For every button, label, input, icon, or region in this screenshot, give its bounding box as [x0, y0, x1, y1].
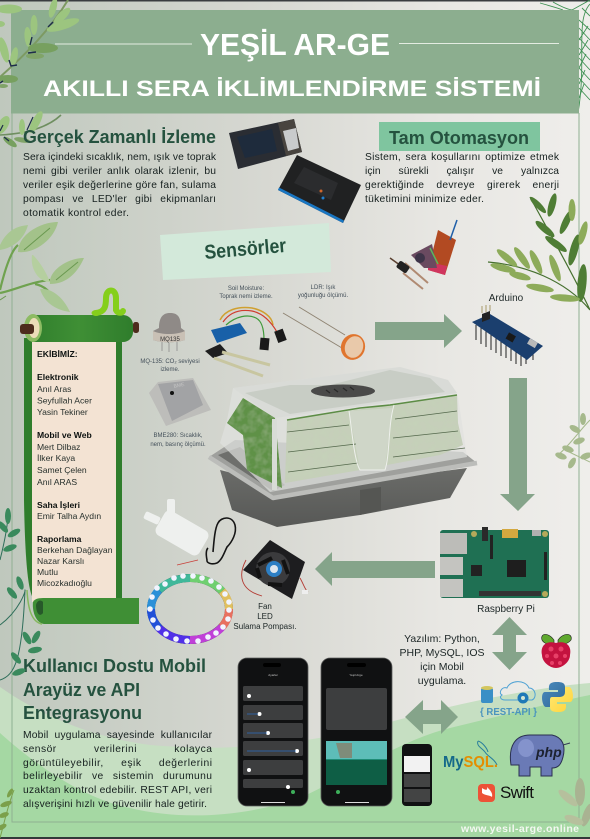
phone: settings screen: Ayarlar [268, 673, 278, 677]
leaves: lower left vine [0, 508, 42, 680]
scroll: team list: İlker Kaya [37, 453, 75, 463]
scroll bottom roll [33, 598, 139, 624]
device: raspberry pi board: Raspberry Pi [477, 604, 535, 615]
arrow: raspberry pi and software [492, 617, 527, 670]
device: raspberry pi board [440, 527, 549, 615]
text: software: için Mobil [420, 661, 464, 673]
sensor: LDR: yoğunluğu ölçümü. [298, 293, 349, 299]
text: software: Yazılım: Python, [404, 633, 480, 645]
device: arduino nano: Arduino [489, 293, 524, 304]
actuator: fan: Sulama Pompası. [233, 622, 297, 631]
scroll: team list: Anıl Aras [37, 384, 71, 394]
phone: settings screen [238, 658, 308, 806]
body text: uzaktan kontrol edebilir. REST API, veri [23, 785, 212, 796]
scroll: team list: Micozkadıoğlu [37, 578, 92, 588]
body text: için sürekli çalışır ve yalnızca [365, 166, 559, 177]
icon: raspberry pi logo [542, 634, 571, 668]
scroll: team list: Mobil ve Web [37, 430, 92, 440]
tray rim [209, 457, 477, 498]
sensor: BME280: nem, basınç ölçümü. [150, 442, 206, 448]
text: software: PHP, MySQL, IOS [400, 647, 484, 659]
icon: python logo [542, 682, 573, 712]
tray [220, 468, 467, 527]
body text: Sistem, sera koşullarını optimize etmek [365, 152, 560, 163]
team names: EKİBİMİZ: [37, 349, 78, 359]
leaves: second top left branch [0, 110, 61, 149]
body text: veriler eşik değerlerine göre fan, sulama [23, 180, 216, 191]
sensor: MQ-135: izleme. [160, 367, 180, 373]
sensor: soil moisture: Toprak nemi izleme. [219, 294, 273, 300]
panel: full automation [365, 122, 562, 205]
icon: rest api [480, 682, 537, 718]
scroll: team list: Emir Talha Aydın [37, 511, 101, 521]
actuator: water pump [143, 499, 235, 565]
vent [311, 384, 375, 398]
leaves: bottom left sprig [0, 788, 14, 838]
scroll top roll [25, 315, 133, 342]
camera view [326, 741, 387, 785]
scroll: team list: Saha İşleri [37, 500, 80, 510]
body text: nemi gibi veriler anlık olarak izlenir, bu [23, 166, 216, 177]
scroll: team list: Nazar Karslı [37, 556, 84, 566]
actuator: fan: Fan [258, 602, 272, 611]
phone: small chart screen [402, 744, 432, 806]
icon: swift: Swift [500, 783, 534, 802]
sensor: soil moisture [205, 286, 287, 376]
scroll: team list: Elektronik [37, 372, 79, 382]
scroll: team list: Seyfullah Acer [37, 396, 92, 406]
leaves: top left branch [0, 0, 81, 88]
subtitle: AKILLI SERA İKLİMLENDİRME SİSTEMİ [43, 76, 541, 101]
leaves: ivy upper left [0, 222, 84, 312]
bottom dark green wave [0, 695, 590, 839]
arrow: arduino to raspberry pi [500, 378, 535, 511]
heading badge [379, 122, 540, 151]
footer url: www.yesil-arge.online [460, 823, 579, 835]
actuator: led ring [147, 573, 232, 644]
header band [11, 10, 579, 114]
leaves: small right sprig [554, 413, 590, 470]
leaves: bottom right sprig [556, 778, 590, 828]
actuator: fan: LED [257, 612, 273, 621]
leaves: top right fern [540, 0, 590, 113]
text: software: uygulama. [418, 675, 466, 687]
sensor: BME280: BME [173, 382, 186, 390]
scroll: team list: Mutlu [37, 567, 58, 577]
arrow: sensors to arduino [375, 314, 462, 348]
sensor: MQ-135 [140, 313, 200, 373]
scroll body [24, 338, 122, 598]
sensor: BME280 [149, 378, 211, 448]
dome [220, 367, 467, 492]
device: assembled soil sensor [390, 220, 457, 289]
tray interior [209, 440, 477, 498]
bottom light green wave [0, 683, 590, 839]
icon: mysql [443, 741, 498, 771]
side foliage [227, 398, 282, 488]
panel: mobile interface [23, 656, 215, 810]
top face foliage [233, 367, 457, 418]
sensor: MQ-135: MQ135 [160, 337, 180, 343]
heading: Arayüz ve API [23, 680, 140, 700]
body text: sensör verilerini kolayca [23, 744, 212, 755]
icon: mysql: MySQL. [443, 754, 498, 771]
sensor: LDR: LDR: Işık [311, 285, 336, 291]
icon: rest api: { REST-API } [480, 706, 537, 718]
scroll: team list: Berkehan Dağlayan [37, 545, 113, 555]
icon: php elephant [510, 735, 570, 776]
arrow: raspberry pi to actuators [315, 552, 435, 586]
leaves: right fern [488, 193, 590, 310]
sensor: LDR [283, 285, 369, 363]
heading: Gerçek Zamanlı İzleme [23, 126, 216, 147]
panel: full automation: Tam Otomasyon [389, 128, 529, 148]
body text: belirleyebilir ve sistemin durumunu [23, 771, 212, 782]
sensor: BME280: BME280: Sıcaklık, [153, 433, 203, 439]
icon: swift [478, 783, 534, 802]
body text: görüntüleyebilir, eşik değerlerini [23, 758, 212, 769]
heading: sensors banner: Sensörler [204, 235, 287, 264]
title: YEŞİL AR-GE [200, 27, 390, 62]
body text: tüketimini minimize eder. [365, 194, 484, 205]
sensor: MQ-135: MQ-135: CO₂ seviyesi [140, 359, 200, 365]
icon: php elephant: php [535, 744, 562, 760]
scroll: team list: Yasin Tekiner [37, 407, 88, 417]
body text: otomatik kontrol eder. [23, 208, 129, 219]
front foliage [285, 395, 463, 483]
scroll: team list: Raporlama [37, 534, 82, 544]
phone: dashboard screen [321, 658, 392, 806]
panel: real-time monitoring [23, 126, 219, 219]
heading: Kullanıcı Dostu Mobil [23, 656, 206, 676]
worm [96, 290, 123, 313]
body text: pompası ve LED'ler gibi ekipmanları [23, 194, 216, 205]
heading: sensors banner [160, 223, 331, 280]
scroll: team list: Mert Dilbaz [37, 442, 80, 452]
body text: gerektiğinde devreye girerek enerji [365, 180, 559, 191]
tray feet [360, 487, 381, 515]
scroll: team list: Samet Çelen [37, 465, 87, 475]
scroll: team list [20, 290, 139, 624]
device: arduino nano [472, 293, 543, 366]
scroll: team list: Anıl ARAS [37, 477, 77, 487]
greenhouse [209, 367, 477, 527]
body text: alışverişini hızlı ve güvenilir hale getirir. [23, 799, 207, 810]
sensor: soil moisture: Soil Moisture: [228, 286, 264, 292]
actuator: fan [233, 540, 308, 631]
body text: Mobil uygulama sayesinde kullanıcılar [23, 730, 213, 741]
phone: dashboard screen: Yeşil Arge [349, 673, 363, 677]
body text: Sera içindeki sıcaklık, nem, ışık ve toprak [23, 152, 217, 163]
arrow: phones and api [405, 700, 458, 734]
screenshots: code editor [229, 119, 361, 223]
heading: Entegrasyonu [23, 703, 142, 723]
